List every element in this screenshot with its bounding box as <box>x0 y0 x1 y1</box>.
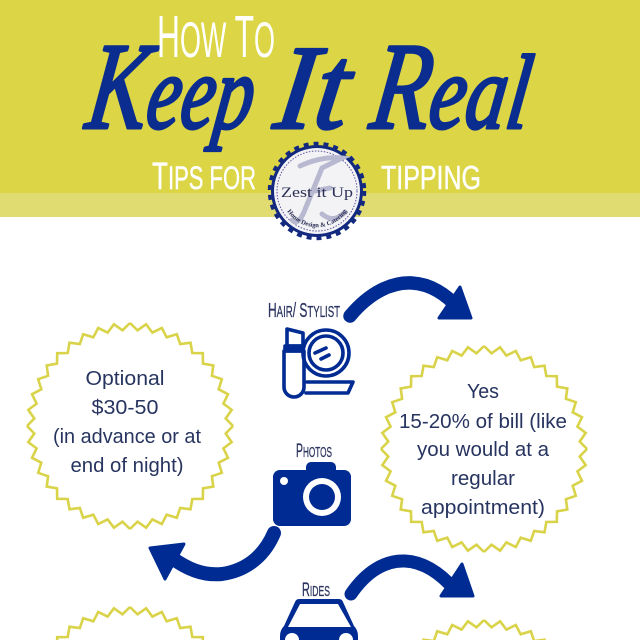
logo badge: Home Design & Catering <box>287 208 348 228</box>
text: optional <box>53 368 201 477</box>
subtitle right: tipping: TIPPING <box>381 159 481 196</box>
title: Keep It Real: It <box>267 23 361 155</box>
label: rides: RIDES <box>302 580 330 601</box>
title: Keep It Real: Keep <box>79 18 266 155</box>
arrow: rides to right <box>351 561 473 596</box>
label: hair stylist: HAIR/ STYLIST <box>268 300 340 322</box>
subtitle left: Tips for: TIPS FOR <box>152 156 256 198</box>
text: yes: you would at a <box>417 439 550 461</box>
text: optional: end of night) <box>70 455 184 477</box>
icon: camera <box>273 462 351 526</box>
text: yes: regular <box>451 468 515 490</box>
starburst: top right <box>381 346 587 552</box>
title: Keep It Real: Real <box>363 18 542 155</box>
arrow: photos to left <box>150 533 274 579</box>
label: photos: PHOTOS <box>296 441 332 462</box>
icon: lipstick and compact <box>284 329 353 397</box>
title: How To: HOW TO <box>157 4 275 70</box>
text: optional: (in advance or at <box>53 426 201 448</box>
text: optional: $30-50 <box>92 397 158 419</box>
title: Keep It Real <box>79 18 542 155</box>
starburst: top left <box>27 323 233 529</box>
starburst: bottom right <box>381 620 587 640</box>
logo badge: Zest it Up <box>281 185 353 201</box>
starburst: bottom left <box>27 607 233 640</box>
arrow: hair to right <box>350 283 471 318</box>
header background <box>0 0 640 217</box>
text: yes: appointment) <box>421 497 545 519</box>
text: yes: Yes <box>467 381 499 403</box>
text: yes <box>399 381 567 519</box>
icon: car <box>280 599 358 640</box>
text: yes: 15-20% of bill (like <box>399 411 567 433</box>
logo badge <box>268 142 366 240</box>
text: optional: Optional <box>86 368 164 390</box>
